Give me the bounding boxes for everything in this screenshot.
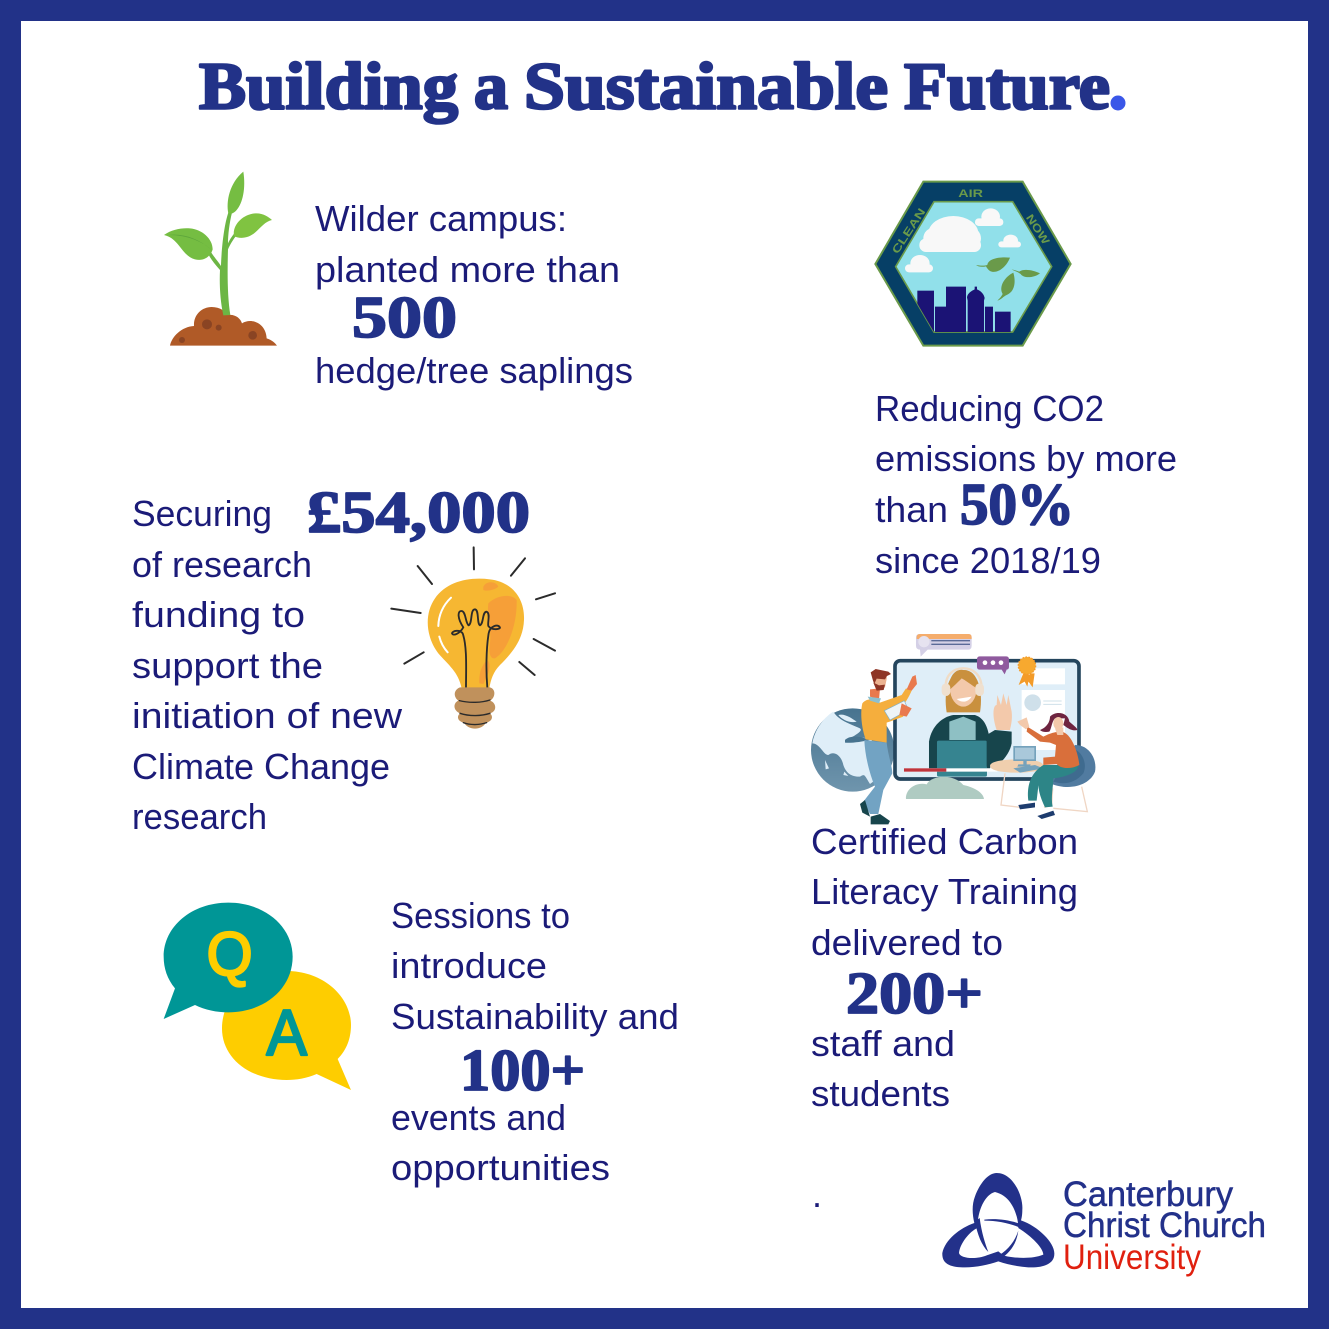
text: sessions and events: events and: [391, 1097, 566, 1138]
text: carbon literacy: Certified Carbon: [811, 821, 1078, 862]
logo: Canterbury Christ Church University: University: [1063, 1238, 1201, 1277]
text: wilder campus: 500: [352, 284, 457, 350]
man: [860, 669, 917, 824]
text: carbon literacy: .: [812, 1174, 822, 1215]
text: carbon literacy: [811, 821, 1078, 1215]
bush: [906, 777, 984, 799]
icon: light bulb: [391, 547, 555, 729]
text: reducing co2: 50%: [960, 471, 1074, 537]
text: research funding: funding to: [132, 594, 305, 635]
logo: Canterbury Christ Church University: [942, 1173, 1266, 1277]
text: sessions and events: 100+: [460, 1037, 585, 1103]
text: carbon literacy: students: [811, 1073, 950, 1114]
globe: [811, 708, 894, 792]
presenter on screen: [929, 668, 1012, 777]
title: Future: [904, 50, 1110, 124]
title: Sustainable: [524, 50, 888, 124]
icon: Q and A speech bubbles: A: [266, 996, 308, 1069]
text: research funding: research: [132, 796, 267, 837]
text: reducing co2: Reducing CO2: [875, 388, 1104, 429]
text: research funding: Securing: [132, 493, 272, 534]
text: sessions and events: introduce: [391, 945, 547, 986]
text: research funding: Climate Change: [132, 746, 390, 787]
icon: online training illustration: [811, 634, 1095, 824]
text: research funding: initiation of new: [132, 695, 403, 736]
icon: clean air now badge: AIR: [958, 188, 983, 200]
video bubble: [916, 634, 972, 657]
text: sessions and events: Sessions to: [391, 895, 570, 936]
text: wilder campus: planted more than: [315, 249, 620, 290]
woman: [990, 713, 1095, 819]
text: carbon literacy: delivered to: [811, 922, 1003, 963]
text: carbon literacy: Literacy Training: [811, 871, 1078, 912]
text: sessions and events: Sustainability and: [391, 996, 679, 1037]
text: reducing co2: than: [875, 489, 948, 530]
text: carbon literacy: 200+: [846, 960, 983, 1026]
text: wilder campus: Wilder campus:: [315, 198, 567, 239]
text: wilder campus: [315, 198, 633, 391]
monitor: [895, 661, 1079, 779]
icon: clean air now badge: [875, 182, 1071, 346]
text: reducing co2: emissions by more: [875, 438, 1177, 479]
logo: Canterbury Christ Church University: Canterbury: [1063, 1175, 1233, 1214]
icon: clean air now badge: NOW: [1023, 212, 1052, 248]
text: research funding: of research: [132, 544, 312, 585]
text: carbon literacy: staff and: [811, 1023, 955, 1064]
text: wilder campus: hedge/tree saplings: [315, 350, 633, 391]
rosette: [1018, 657, 1036, 687]
text: reducing co2: [875, 388, 1177, 581]
title: [199, 50, 1126, 124]
icon: Q and A speech bubbles: Q: [207, 920, 253, 989]
progress bar: [904, 768, 997, 772]
text: research funding: support the: [132, 645, 323, 686]
title: a: [474, 50, 508, 124]
text: reducing co2: since 2018/19: [875, 540, 1101, 581]
text: sessions and events: [391, 895, 679, 1188]
icon: seedling: [164, 172, 277, 346]
title: Building: [199, 50, 458, 124]
icon: clean air now badge: CLEAN: [890, 206, 928, 256]
text: research funding: £54,000: [307, 479, 530, 545]
text: sessions and events: opportunities: [391, 1147, 610, 1188]
logo: Canterbury Christ Church University: Christ Church: [1063, 1206, 1266, 1245]
chat bubble: [977, 656, 1009, 674]
icon: Q and A speech bubbles: [164, 903, 351, 1090]
text: research funding: [132, 479, 530, 837]
